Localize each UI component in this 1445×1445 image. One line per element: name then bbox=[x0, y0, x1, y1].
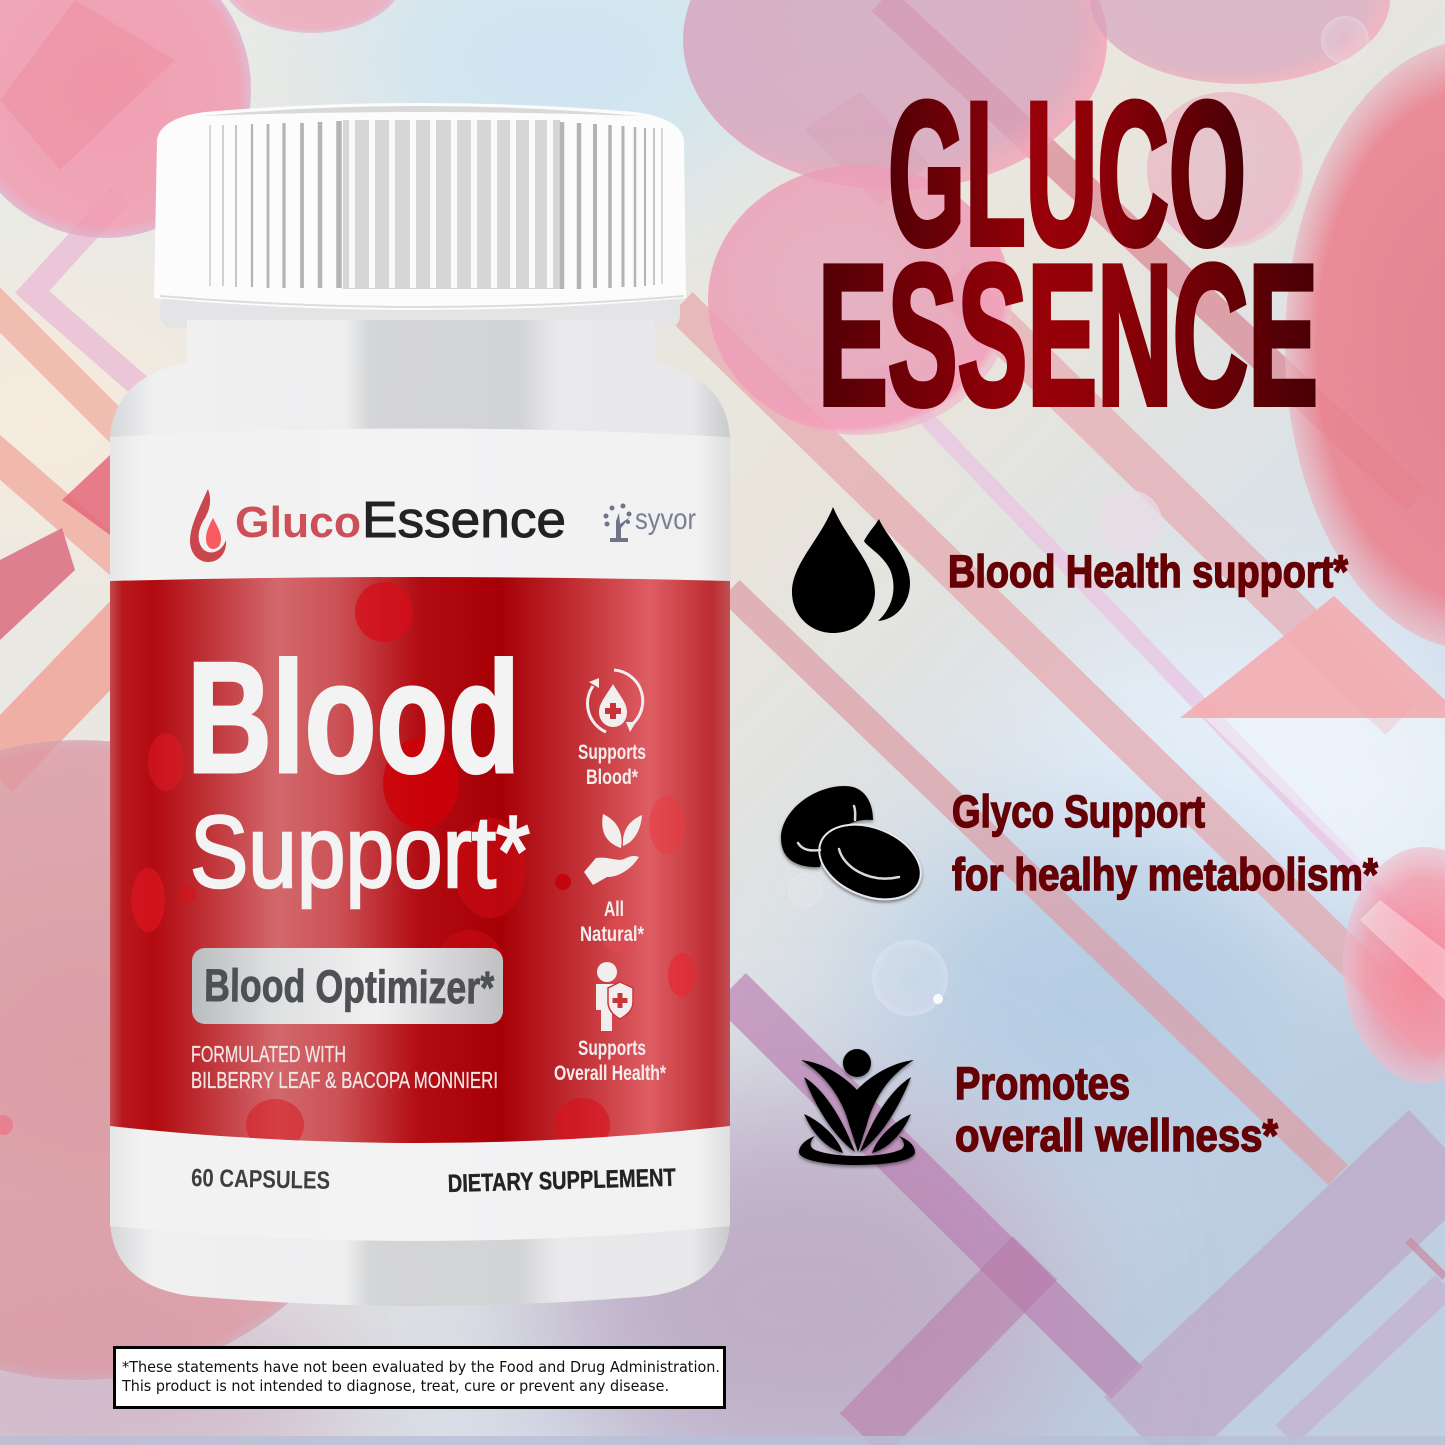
headline: Blood Support: Support* bbox=[190, 795, 530, 909]
logo bbox=[190, 489, 696, 562]
feature: blood health bbox=[792, 507, 1348, 633]
capsule count: 60 CAPSULES bbox=[191, 1164, 330, 1195]
text: Promotes bbox=[955, 1058, 1130, 1109]
red label panel bbox=[110, 577, 730, 1143]
text: for healhy metabolism* bbox=[952, 849, 1378, 900]
right stripes bbox=[680, 0, 1445, 1435]
benefit: all natural: Natural* bbox=[580, 923, 645, 946]
benefit: overall health bbox=[554, 962, 667, 1085]
syvor brand: syvor bbox=[635, 503, 696, 536]
benefit: overall health: Overall Health* bbox=[554, 1062, 667, 1085]
benefit: supports blood: Blood* bbox=[586, 766, 639, 789]
formula text: BILBERRY LEAF & BACOPA MONNIERI bbox=[191, 1067, 498, 1093]
icon: wellness figure bbox=[799, 1049, 915, 1165]
Blood Optimizer badge bbox=[192, 948, 503, 1024]
headline: Blood Support bbox=[187, 630, 530, 909]
icon: two drops bbox=[792, 507, 910, 633]
logo: Essence bbox=[362, 491, 566, 548]
Blood Optimizer badge: Blood Optimizer* bbox=[204, 959, 494, 1014]
icon: hand with leaves bbox=[584, 814, 642, 885]
feature: wellness bbox=[799, 1049, 1278, 1165]
left stripes bbox=[0, 195, 150, 770]
wordmark: Gluco bbox=[235, 498, 361, 547]
benefit: supports blood bbox=[578, 670, 646, 789]
cap bbox=[154, 103, 686, 310]
bottle bbox=[110, 103, 730, 1306]
benefit: overall health: Supports bbox=[578, 1037, 646, 1060]
bottle neck and shoulder bbox=[110, 296, 730, 440]
benefit: all natural bbox=[580, 814, 645, 946]
icon: circular drop bbox=[587, 670, 643, 732]
text bbox=[952, 786, 1378, 900]
text: Blood Health support* bbox=[948, 546, 1348, 597]
label spots bbox=[131, 582, 696, 1152]
text bbox=[955, 1058, 1278, 1161]
text: overall wellness* bbox=[955, 1110, 1278, 1161]
icon: blood cells bbox=[781, 786, 932, 913]
formula text: FORMULATED WITH bbox=[191, 1041, 346, 1067]
headline: Blood Support: Blood bbox=[187, 630, 520, 806]
feature: glyco support bbox=[781, 786, 1378, 913]
disclaimer bbox=[114, 1348, 724, 1408]
title bbox=[818, 60, 1318, 447]
disclaimer: *These statements have not been evaluated by the Food and Drug Administration. bbox=[122, 1358, 720, 1376]
dietary supplement: DIETARY SUPPLEMENT bbox=[447, 1164, 676, 1198]
benefit: all natural: All bbox=[604, 898, 624, 921]
icon: blood drop logo bbox=[190, 489, 226, 562]
icon: person with shield bbox=[596, 962, 633, 1031]
formula text bbox=[191, 1041, 498, 1093]
syvor brand bbox=[604, 503, 696, 542]
disclaimer: This product is not intended to diagnose, treat, cure or prevent any disease. bbox=[121, 1377, 669, 1395]
white label band bbox=[110, 428, 730, 1241]
benefit: supports blood: Supports bbox=[578, 741, 646, 764]
bottle lower body bbox=[110, 1130, 730, 1306]
cap ridges bbox=[210, 121, 662, 289]
text: Glyco Support bbox=[952, 786, 1205, 837]
